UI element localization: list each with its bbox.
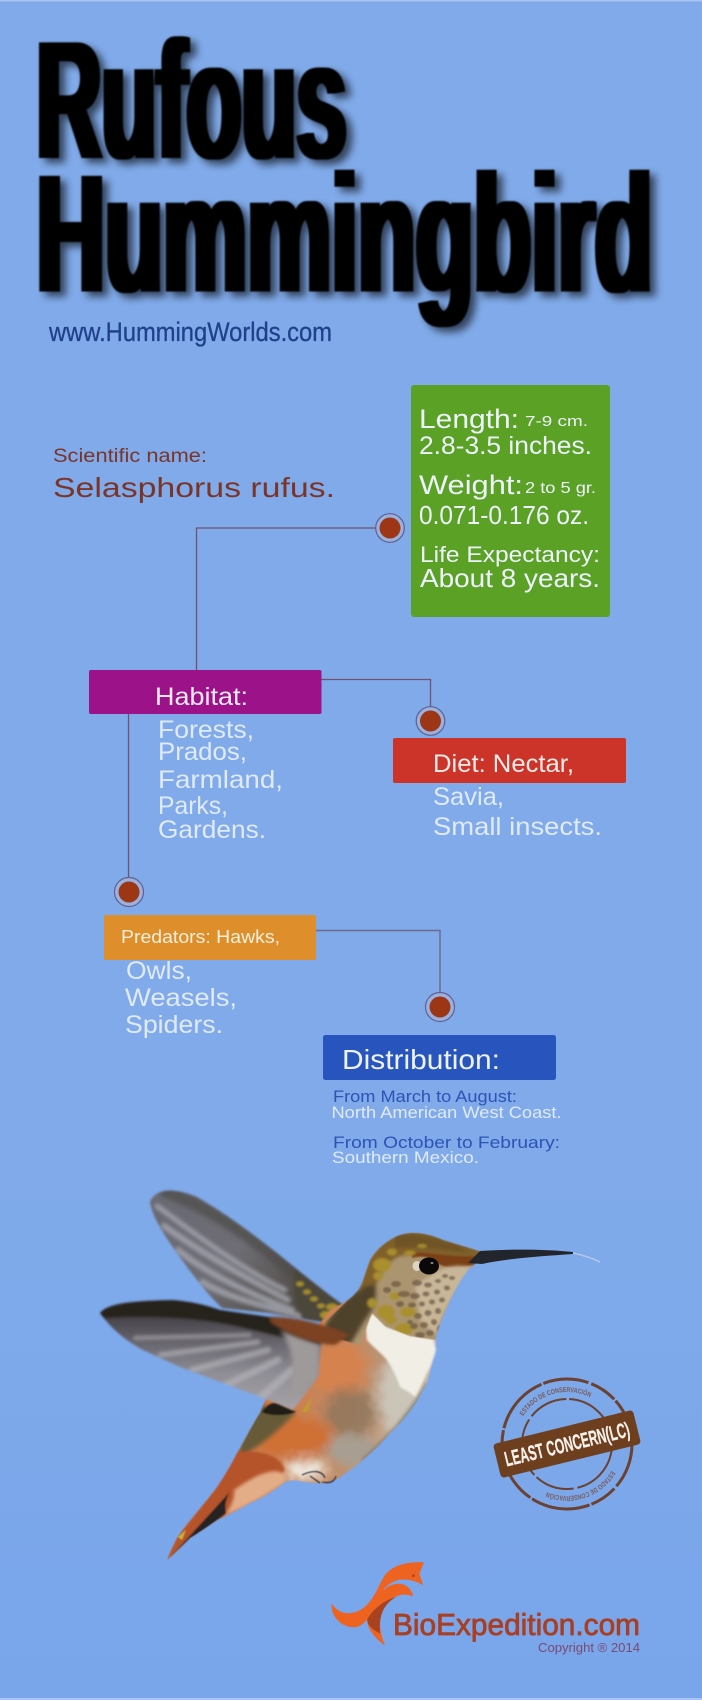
scientific name: Selasphorus rufus. <box>53 472 335 503</box>
nape <box>325 1285 376 1345</box>
body plumage <box>257 1342 422 1480</box>
weight: 0.071-0.176 oz. <box>419 500 589 530</box>
pale cheek <box>415 1266 472 1335</box>
bird head <box>324 1232 481 1345</box>
length: Length: <box>419 404 519 434</box>
habitat list <box>158 716 283 844</box>
weight: Weight: <box>419 470 523 500</box>
predators list: Weasels, <box>125 984 237 1012</box>
length: 7-9 cm. <box>525 413 588 430</box>
icon: fox <box>332 1562 424 1646</box>
connector: measurements to habitat <box>196 528 376 670</box>
predators list <box>125 957 237 1039</box>
connector: predators to distribution <box>316 930 440 995</box>
diet list: Small insects. <box>433 813 602 841</box>
rust eye stripe <box>412 1252 480 1268</box>
upper wing <box>148 1189 343 1323</box>
panel: measurements <box>411 385 610 617</box>
distribution text <box>332 1088 562 1167</box>
panel: diet: Diet: Nectar, <box>433 750 574 778</box>
gold feathers <box>367 1244 427 1335</box>
copyright: Copyright ® 2014 <box>538 1640 640 1655</box>
predators list: Spiders. <box>125 1011 223 1039</box>
lower wing <box>95 1295 350 1415</box>
node: distribution <box>426 992 454 1022</box>
habitat list: Prados, <box>158 738 247 766</box>
throat speckles <box>383 1274 455 1338</box>
shadow under wing <box>262 1403 296 1415</box>
throat patch <box>365 1313 436 1397</box>
life expectancy <box>420 542 600 593</box>
title: Rufous <box>36 6 346 194</box>
connector: habitat to predators <box>128 714 130 878</box>
panel: distribution <box>323 1035 556 1080</box>
predators list: Owls, <box>126 957 192 985</box>
scientific name <box>53 446 335 503</box>
hummingbird illustration <box>95 1180 600 1570</box>
connector: habitat to diet <box>321 680 430 708</box>
panel: habitat: Habitat: <box>155 683 248 711</box>
gold wing-base feathers <box>302 1397 312 1412</box>
stamp banner <box>493 1410 641 1478</box>
stamp rings <box>502 1379 632 1509</box>
length: 2.8-3.5 inches. <box>419 432 592 460</box>
habitat list: Parks, <box>158 792 228 820</box>
panel: diet <box>393 738 626 783</box>
scientific name: Scientific name: <box>53 446 207 467</box>
website url: www.HummingWorlds.com <box>48 317 332 347</box>
tail <box>167 1452 285 1560</box>
stamp arc text: ESTADO DE CONSERVACIÓN <box>546 1471 616 1501</box>
feet <box>302 1472 336 1483</box>
panel: predators <box>104 915 316 960</box>
distribution text: From March to August: <box>333 1088 517 1106</box>
habitat list: Forests, <box>158 716 254 744</box>
stamp arc text: ESTADO DE CONSERVACIÓN <box>519 1387 592 1416</box>
node: predators <box>114 878 144 906</box>
habitat list: Gardens. <box>158 816 266 844</box>
habitat list: Farmland, <box>158 766 283 794</box>
distribution text: North American West Coast. <box>332 1104 562 1122</box>
rump <box>238 1405 296 1458</box>
eye <box>412 1258 439 1274</box>
node: diet <box>416 707 445 735</box>
life expectancy: About 8 years. <box>420 563 600 593</box>
diet list: Savia, <box>433 783 504 811</box>
crown <box>359 1232 480 1290</box>
stamp arc text <box>519 1387 616 1501</box>
weight <box>419 470 596 530</box>
bird body <box>166 1300 436 1560</box>
panel: distribution: Distribution: <box>342 1044 500 1075</box>
length <box>419 404 592 460</box>
panel: habitat <box>89 670 322 714</box>
node: measurements <box>376 514 404 542</box>
distribution text: Southern Mexico. <box>332 1149 479 1167</box>
title <box>36 6 652 328</box>
rust shoulder band <box>270 1317 350 1345</box>
panel: predators: Predators: Hawks, <box>121 927 280 947</box>
logo: BioExpedition <box>332 1562 640 1655</box>
beak <box>468 1250 600 1264</box>
logo wordmark: BioExpedition.com <box>393 1607 640 1642</box>
conservation stamp <box>494 1378 640 1510</box>
weight: 2 to 5 gr. <box>525 480 596 497</box>
life expectancy: Life Expectancy: <box>420 542 600 567</box>
distribution text: From October to February: <box>333 1134 560 1152</box>
diet list <box>433 783 602 841</box>
